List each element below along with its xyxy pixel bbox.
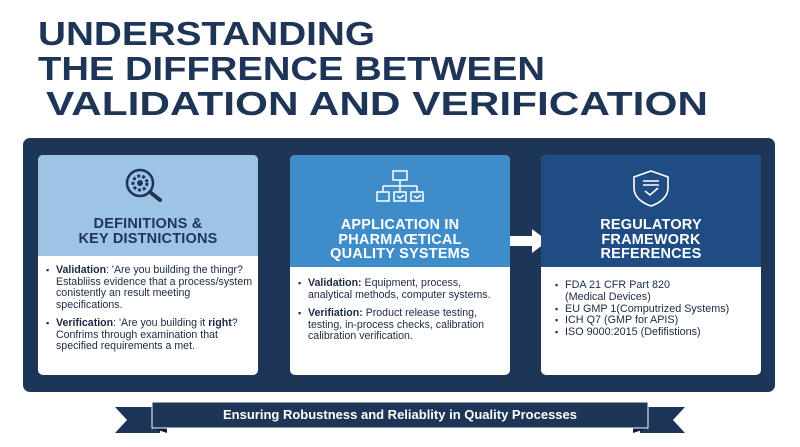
card body: regulatory: (Medical Devices) <box>565 291 651 303</box>
card header: regulatory: REFERENCES <box>600 246 702 262</box>
card header: application <box>290 155 510 267</box>
icon: hierarchy <box>376 170 424 202</box>
card header: regulatory <box>541 155 761 267</box>
card body: application: Validation: Equipment, process, analytical methods, computer systems. <box>308 277 491 300</box>
icon: gear magnifier <box>126 168 162 202</box>
card body: regulatory: EU GMP 1(Computrized Systems) <box>565 303 729 315</box>
card body: regulatory: ISO 9000:2015 (Defifistions) <box>565 326 701 338</box>
card: regulatory <box>541 155 761 375</box>
title: VALIDATION AND VERIFICATION <box>46 85 708 122</box>
card body: regulatory <box>555 279 729 338</box>
ribbon banner <box>115 402 685 433</box>
card body: definitions: Validation: 'Are you building the thingr? Establiiss evidence that a process/system conistently an result meeting specifications. <box>56 264 252 310</box>
card header: application: QUALITY SYSTEMS <box>330 246 470 262</box>
card body: application <box>298 277 491 342</box>
title: THE DIFFRENCE BETWEEN <box>38 50 545 87</box>
card header: definitions <box>38 155 258 256</box>
arrow <box>510 229 541 253</box>
card header: regulatory: REGULATORY <box>600 217 702 233</box>
card header: application: PHARMAŒTICAL <box>338 232 462 248</box>
card header: definitions: DEFINITIONS & <box>94 216 202 232</box>
outer panel <box>23 138 775 392</box>
card header: regulatory: FRAMEWORK <box>601 232 701 248</box>
card body: regulatory: ICH Q7 (GMP for APIS) <box>565 314 678 326</box>
card body: definitions <box>46 264 252 352</box>
card header: definitions: KEY DISTNICTIONS <box>78 230 218 246</box>
card body: application: Verifiation: Product release testing, testing, in-process checks, calibration calibration verification. <box>308 307 484 342</box>
card: application <box>290 155 510 375</box>
title: UNDERSTANDING <box>38 15 375 52</box>
ribbon banner: Ensuring Robustness and Reliablity in Quality Processes <box>223 407 577 422</box>
card header: application: APPLICATION IN <box>341 217 459 233</box>
icon: shield <box>633 170 669 207</box>
card body: regulatory: FDA 21 CFR Part 820 <box>565 279 670 291</box>
card: definitions <box>38 155 258 375</box>
title <box>38 15 708 122</box>
card body: definitions: Verification: 'Are you building it right? Confrims through examination that specified requirements a met. <box>56 317 246 352</box>
